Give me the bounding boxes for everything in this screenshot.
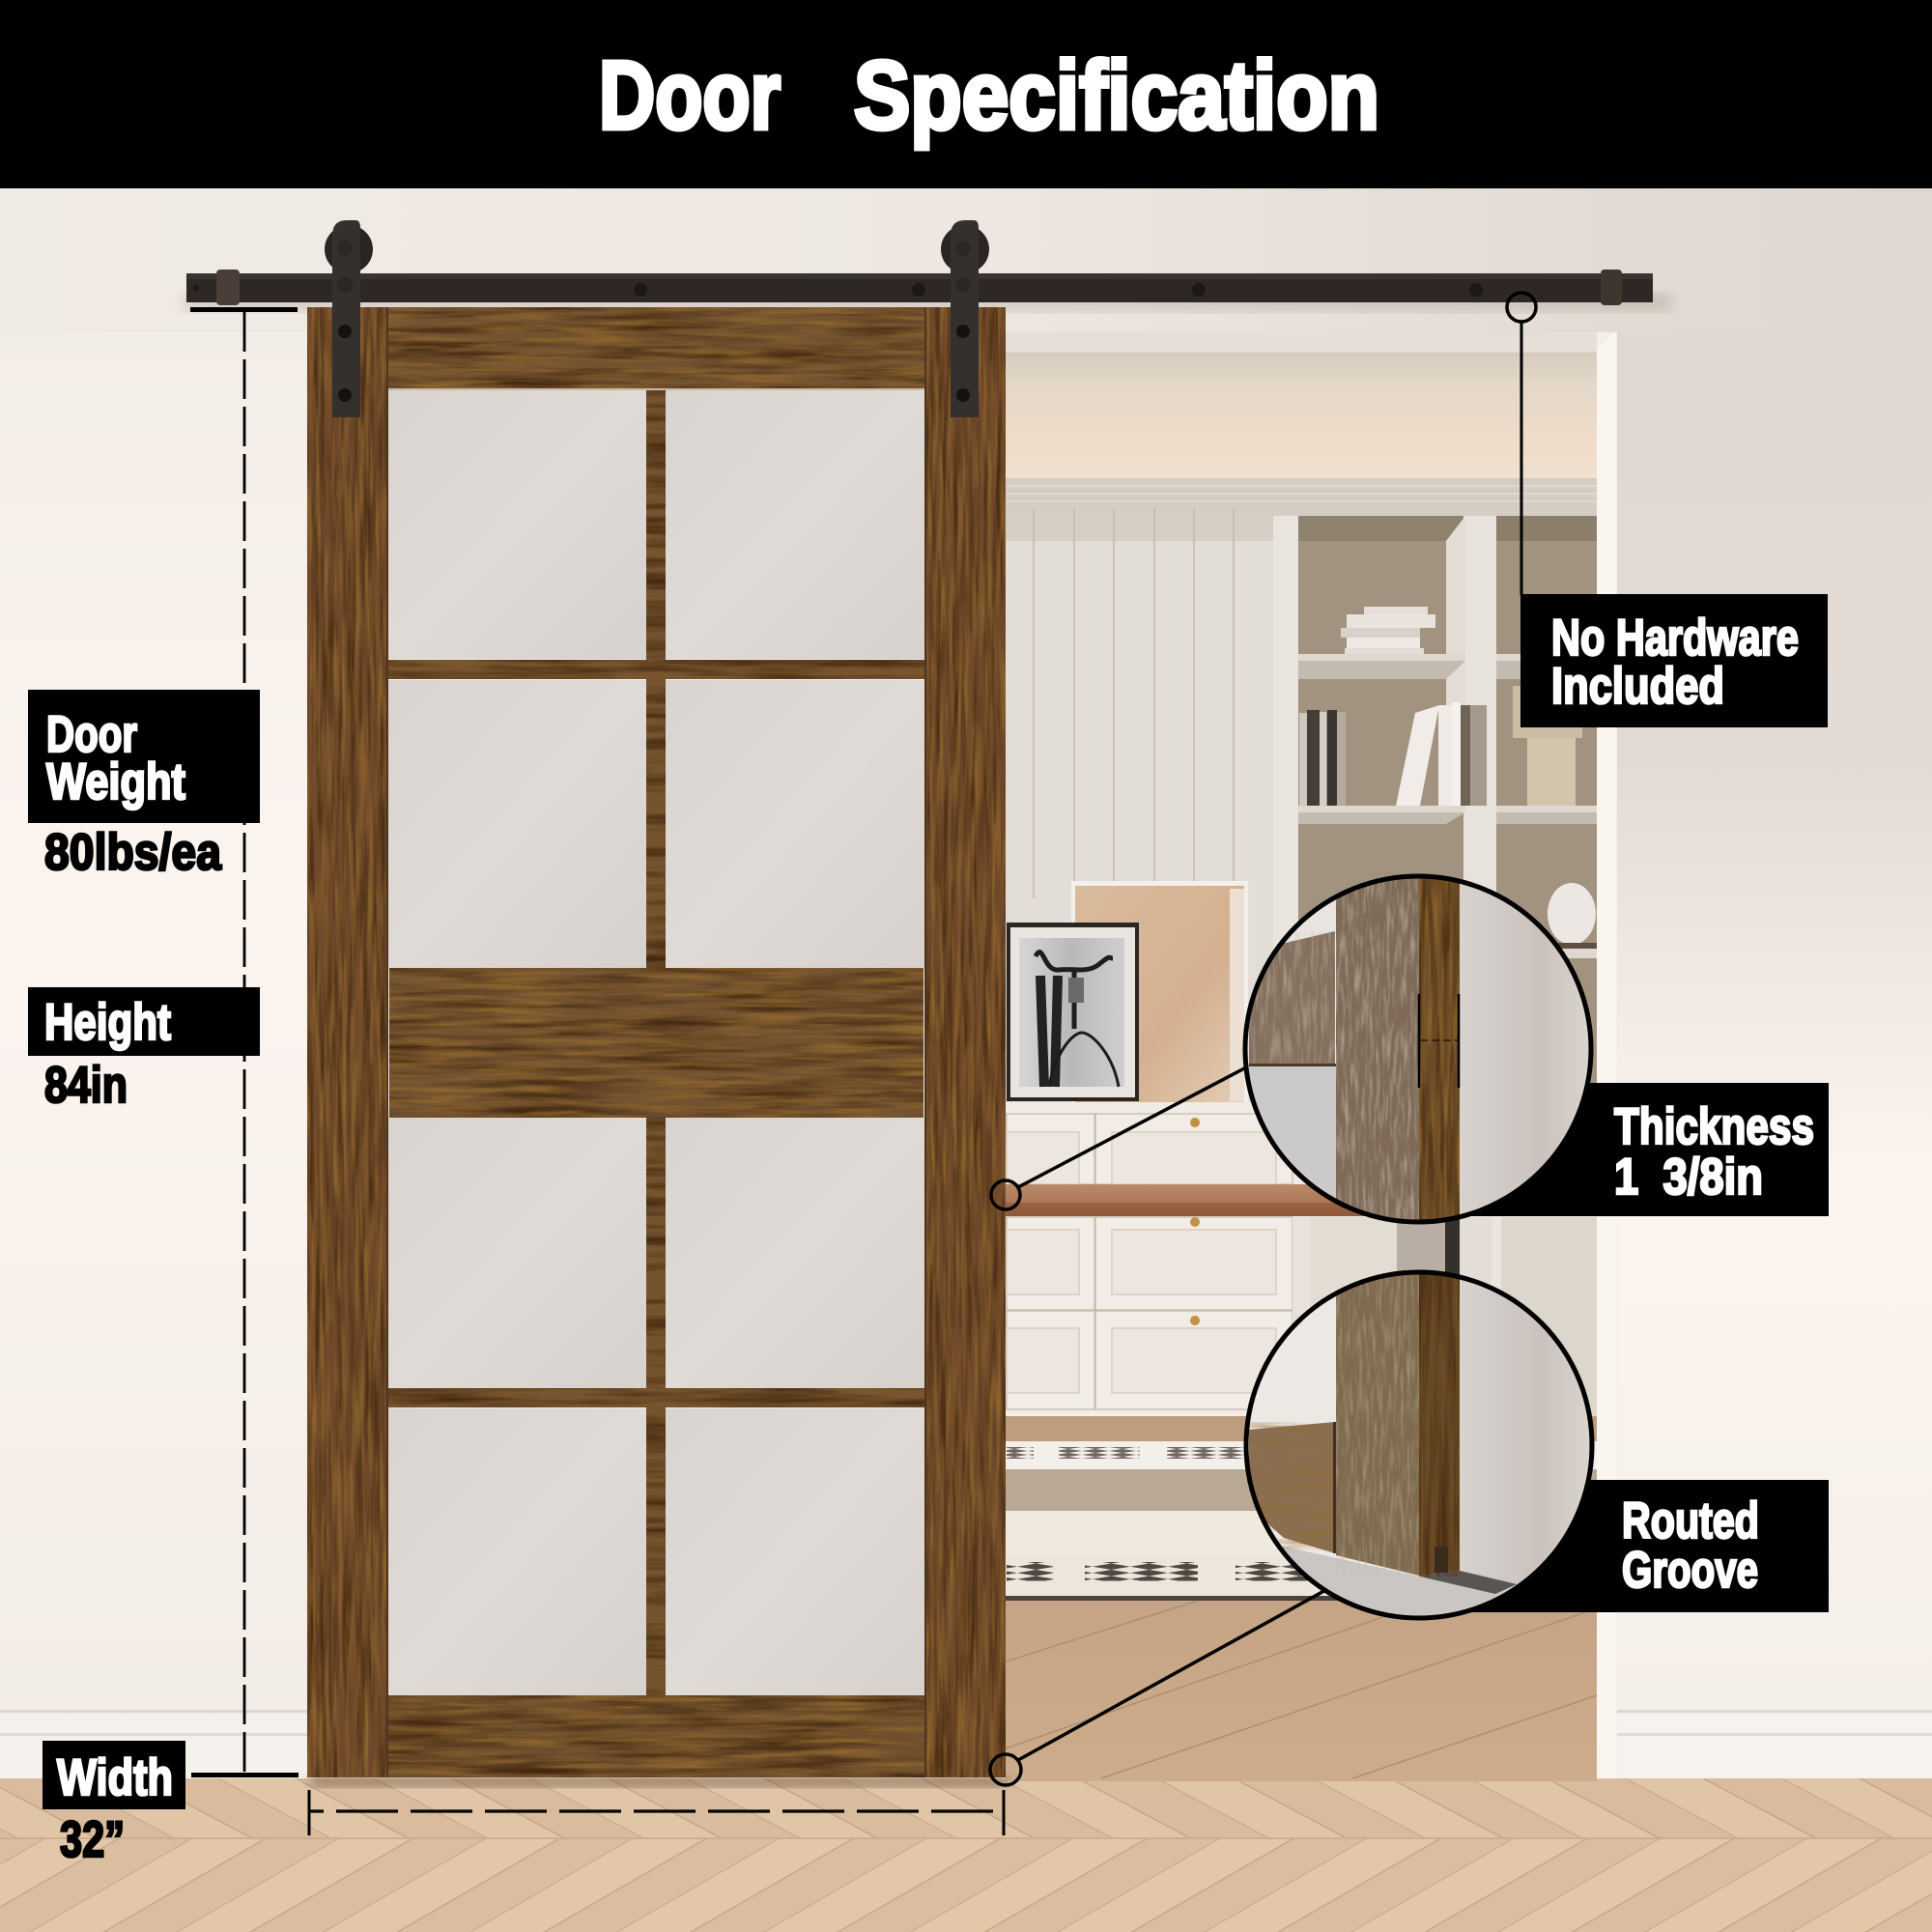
- detail circle: door thickness: [1244, 875, 1595, 1223]
- callout: width: [43, 1741, 185, 1868]
- end stops: [216, 270, 240, 305]
- left hanger strap: [332, 220, 360, 417]
- callout: height: 84in: [44, 1057, 128, 1114]
- callout: no hardware included: Included: [1551, 658, 1724, 715]
- callout: width: 32”: [60, 1811, 125, 1868]
- height dimension line: [190, 307, 298, 1777]
- left stile: [307, 307, 388, 1777]
- callout box: routed groove: Routed: [1622, 1492, 1759, 1549]
- callout: door weight: Weight: [46, 753, 185, 810]
- cabinet drawers: [1006, 1102, 1310, 1410]
- title: Specification: [854, 42, 1379, 150]
- mullions: [388, 390, 924, 1695]
- right-hand wall cabinet: [1310, 1215, 1597, 1468]
- callout: no hardware included: [1520, 594, 1828, 727]
- room floor: [1005, 1416, 1597, 1781]
- patterned rug: [1006, 1441, 1597, 1601]
- stacked books: [1341, 607, 1435, 654]
- callout: width: Width: [57, 1749, 173, 1806]
- callout: door weight: [28, 690, 260, 881]
- callout box: thickness: [1449, 1083, 1829, 1216]
- door opening jamb: [1597, 331, 1616, 1778]
- callout: door weight: Door: [46, 706, 137, 763]
- title: Door: [599, 42, 781, 150]
- callout: door weight: 80lbs/ea: [44, 824, 221, 881]
- barn door: [307, 307, 1006, 1777]
- callout box: thickness: 1 3/8in: [1614, 1149, 1763, 1206]
- glass panes: [388, 390, 924, 1695]
- upright books: [1299, 702, 1487, 806]
- callout: no hardware included: No Hardware: [1551, 610, 1799, 667]
- bookcase: [1273, 516, 1597, 1115]
- thickness ticks: [1419, 994, 1459, 1088]
- soffit: [1006, 332, 1597, 354]
- baseboards: [0, 1710, 1932, 1778]
- door shadow on the floor: [311, 1776, 1007, 1787]
- middle rail: [389, 968, 923, 1118]
- top rail: [388, 307, 924, 390]
- bottom rail: [388, 1695, 924, 1777]
- left hanger wheel: [325, 225, 373, 273]
- callout box: routed groove: [1449, 1480, 1829, 1612]
- callout: no hardware leader: [1507, 293, 1536, 595]
- right stile: [924, 307, 1006, 1777]
- leaning art print: [1071, 881, 1248, 1103]
- callout box: routed groove: Groove: [1622, 1542, 1758, 1599]
- crown molding: [1006, 478, 1597, 541]
- callout: height: Height: [44, 994, 171, 1051]
- sliding track rail: [186, 270, 1653, 305]
- width dimension line: [309, 1790, 1004, 1835]
- paneled wall: [1006, 508, 1273, 1121]
- header bar: [0, 0, 1932, 188]
- room seen through the opening: [1005, 332, 1597, 1781]
- track bolts: [193, 283, 1483, 297]
- callout: height: [28, 987, 260, 1114]
- right hanger wheel: [941, 225, 989, 273]
- vase: [1546, 883, 1597, 958]
- rail shadow: [184, 293, 1671, 312]
- thickness leader: [991, 1067, 1246, 1209]
- detail circle: routed groove: [1244, 1271, 1595, 1619]
- routed groove notch: [1435, 1547, 1448, 1573]
- right hanger strap: [951, 220, 979, 417]
- floor: [0, 1778, 1932, 1932]
- routed groove leader: [990, 1588, 1329, 1785]
- title: [599, 42, 1379, 150]
- ceiling glow: [1006, 353, 1597, 478]
- sculpture lamp: [1513, 686, 1582, 806]
- framed bicycle photo: [1007, 923, 1139, 1101]
- callout box: thickness: Thickness: [1614, 1098, 1814, 1155]
- wood countertop: [1006, 1184, 1373, 1216]
